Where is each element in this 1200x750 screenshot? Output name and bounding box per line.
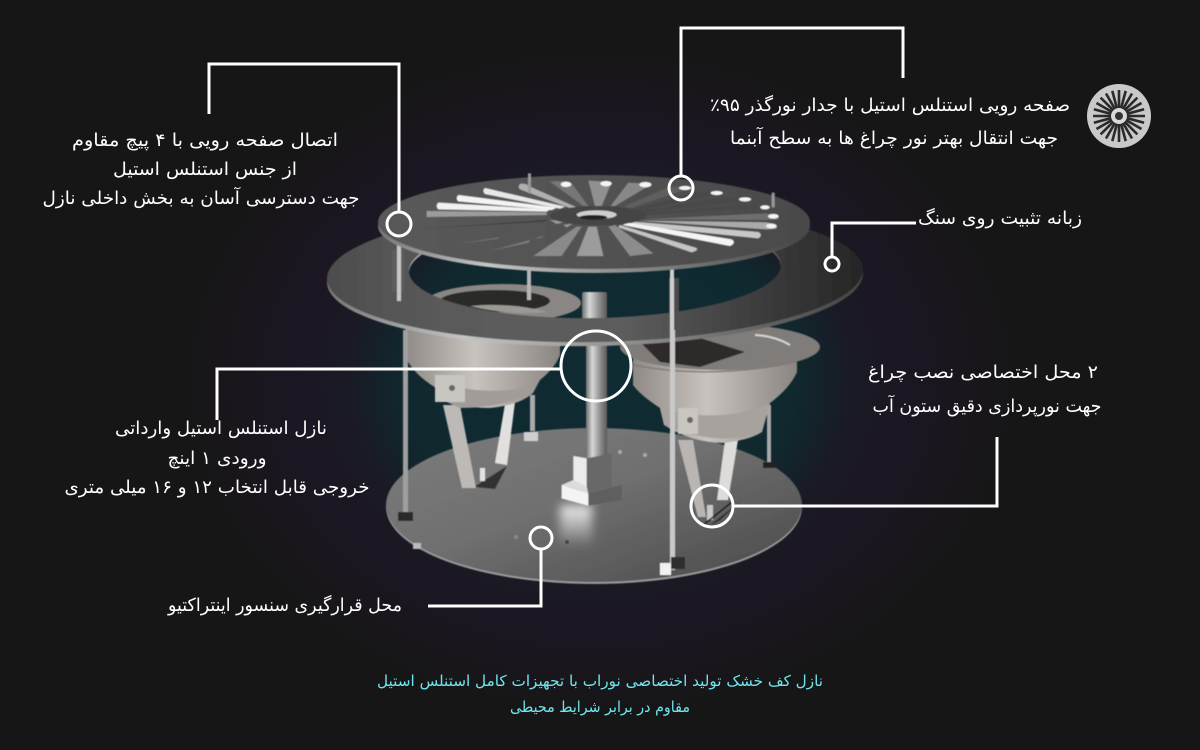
text: imported nozzle [64,418,370,498]
callout leader: imported nozzle [217,331,631,420]
text: top plate fastening: اتصال صفحه رویی با ۴ پیچ مقاوم [72,130,338,151]
text: stainless top plate: صفحه رویی استنلس استیل با جدار نورگذر ۹۵٪ [710,94,1070,116]
callout leader: sensor position [428,527,552,606]
text: stainless top plate: جهت انتقال بهتر نور چراغ ها به سطح آبنما [730,126,1058,149]
bottom plate pins [480,468,732,526]
text: lamp mounts: جهت نورپردازی دقیق ستون آب [872,394,1102,417]
text: imported nozzle: نازل استنلس استیل وارداتی [115,418,327,439]
footer caption: نازل کف خشک تولید اختصاصی نوراب با تجهیزات کامل استنلس استیل [377,672,823,690]
text: imported nozzle: ورودی ۱ اینچ [168,448,266,469]
right lamp cup [620,324,820,517]
central nozzle column and base block [562,330,622,506]
back rod behind plate [527,270,531,300]
callout leader: stainless top plate [669,28,903,200]
rod behind ring right [669,278,679,320]
column cap seen through ring [582,292,607,320]
text: top plate fastening [42,130,360,209]
rods in front of ring [392,225,685,575]
left lamp cup [405,284,581,488]
text: lamp mounts: ۲ محل اختصاصی نصب چراغ [868,362,1098,383]
text: stainless top plate [710,94,1070,149]
footer caption: مقاوم در برابر شرایط محیطی [510,698,690,716]
text: top plate fastening: جهت دسترسی آسان به بخش داخلی نازل [42,186,360,209]
text: sensor position: محل قرارگیری سنسور اینتراکتیو [167,594,402,616]
bottom plate [386,428,802,584]
callout leader: lamp mounts [691,437,997,527]
text: imported nozzle: خروجی قابل انتخاب ۱۲ و ۱۶ میلی متری [64,477,370,498]
footer caption [377,672,823,716]
mounting ring [326,201,864,351]
nozzle product illustration [326,173,864,584]
callout leader: stone fixing tab [825,223,916,271]
top stainless steel plate with slots [378,173,810,273]
text: lamp mounts [868,362,1102,417]
rods behind cups [524,395,777,468]
icon: perforated plate wheel [1087,84,1151,148]
text: top plate fastening: از جنس استنلس استیل [113,159,297,180]
text: stone fixing tab: زبانه تثبیت روی سنگ [918,207,1082,229]
callout leader: top plate fastening [209,64,411,236]
